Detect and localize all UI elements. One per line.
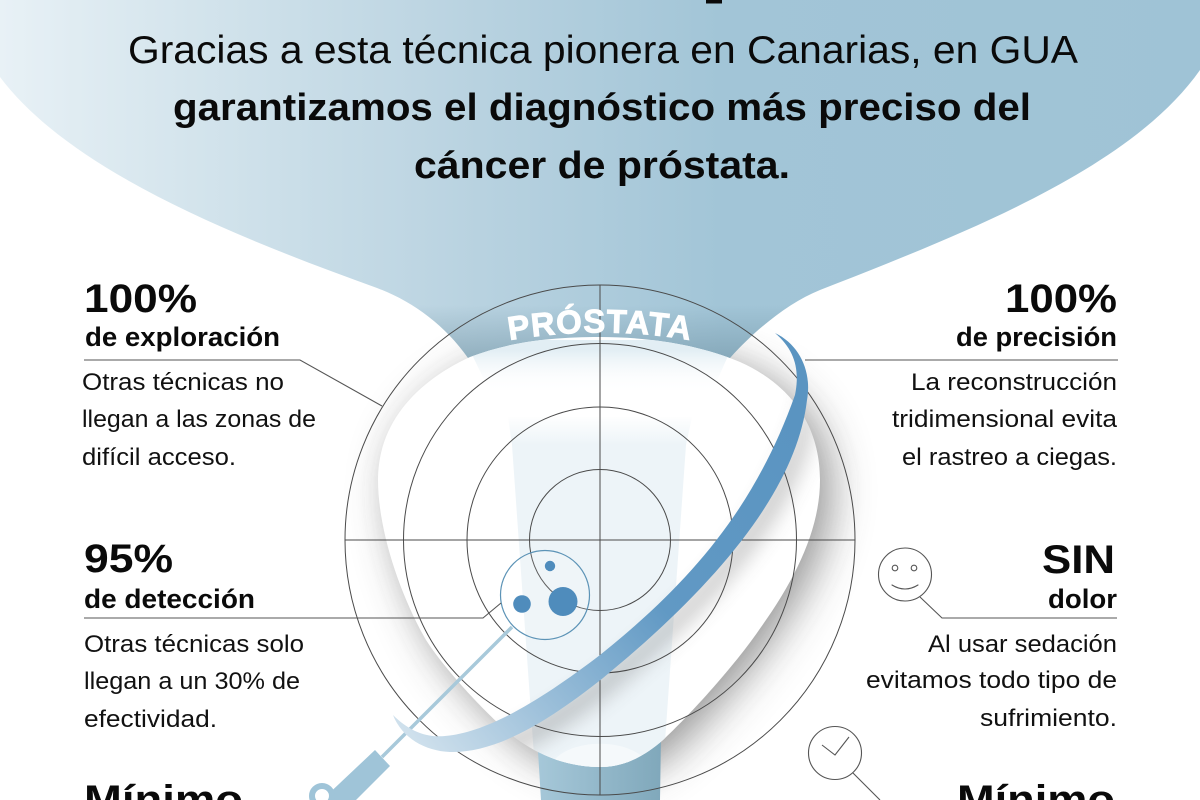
stat: 100% de precisión: el rastreo a ciegas.: [902, 444, 1117, 471]
PROSTATA curved label: PRÓSTATA: [508, 303, 690, 340]
icon: smiley face: [878, 548, 932, 601]
stat: SIN dolor: [866, 538, 1117, 732]
stat: 100% de exploración: [82, 277, 382, 471]
concentric target rings and crosshair: [345, 285, 855, 795]
funnel background panel: [0, 0, 1200, 358]
intro heading: garantizamos el diagnóstico más preciso del: [173, 87, 1031, 129]
stat: 100% de exploración: Otras técnicas no: [82, 369, 284, 396]
stat: SIN dolor: evitamos todo tipo de: [866, 667, 1117, 694]
top stub of cut-off title: [706, 0, 722, 4]
stat: 100% de exploración: llegan a las zonas de: [82, 406, 316, 433]
prostate drop shadow: [390, 347, 832, 777]
biopsy guide crescent: [393, 333, 808, 752]
needle and syringe: [312, 627, 512, 800]
lesion magnifier with tumour dots: [500, 550, 590, 640]
stat: 95% de detección: efectividad.: [84, 706, 217, 733]
intro heading: [128, 29, 1078, 187]
stat: SIN dolor: sufrimiento.: [980, 705, 1117, 732]
stat: 100% de precisión: La reconstrucción: [911, 369, 1117, 396]
stat: 95% de detección: Otras técnicas solo: [84, 631, 304, 658]
stat: 95% de detección: [84, 537, 501, 733]
stat: 100% de exploración: de exploración: [85, 322, 280, 352]
stat: SIN dolor: dolor: [1048, 584, 1117, 614]
stat: 100% de precisión: tridimensional evita: [892, 406, 1118, 433]
stat: 100% de precisión: [805, 277, 1118, 471]
stat: 95% de detección: de detección: [84, 584, 255, 614]
stat: SIN dolor: SIN: [1042, 538, 1115, 582]
stat: 100% de precisión: 100%: [1005, 277, 1117, 321]
prostate body: [378, 337, 820, 770]
intro heading: cáncer de próstata.: [414, 145, 790, 187]
stat: 95% de detección: llegan a un 30% de: [84, 668, 300, 695]
intro heading: Gracias a esta técnica pionera en Canarias, en GUA: [128, 29, 1078, 72]
stat: 100% de precisión: de precisión: [956, 322, 1117, 352]
icon: clock with check: [808, 726, 880, 800]
stat: 100% de exploración: difícil acceso.: [82, 444, 236, 471]
stat: 100% de exploración: 100%: [84, 277, 197, 321]
stat: SIN dolor: Al usar sedación: [928, 631, 1117, 658]
stat: 95% de detección: 95%: [84, 537, 173, 581]
urethra lower tube: [537, 735, 661, 800]
